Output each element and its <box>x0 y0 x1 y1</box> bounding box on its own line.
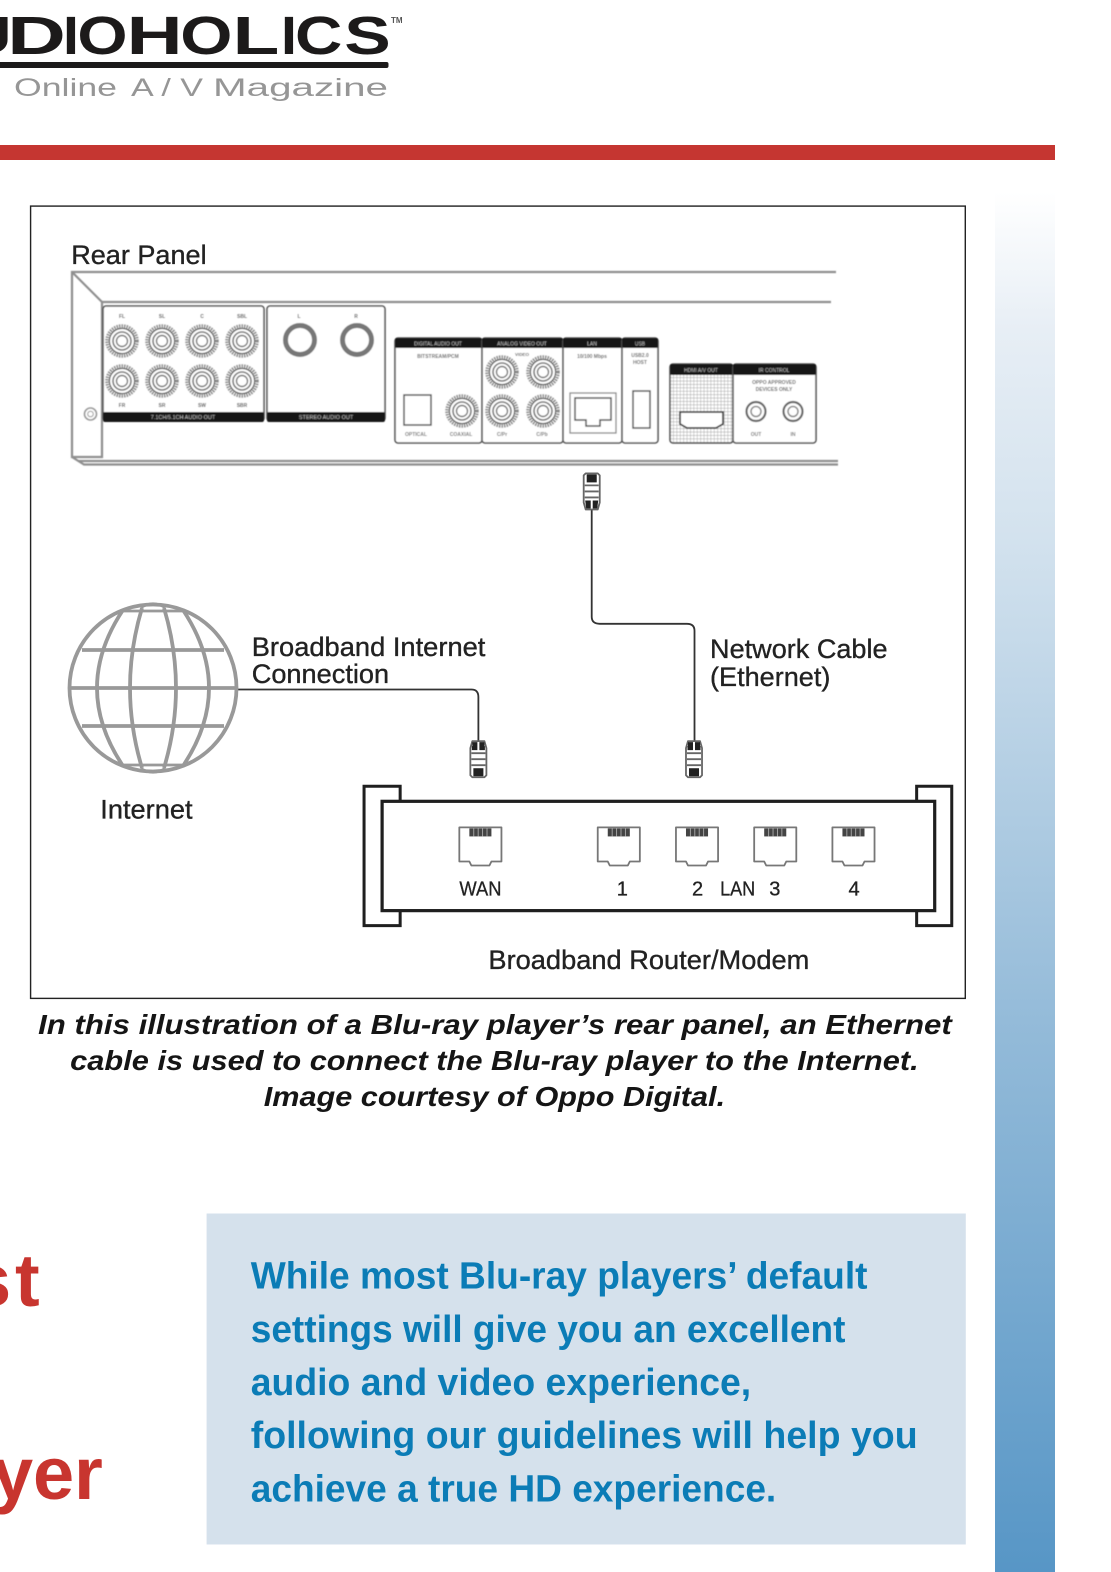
callout text: settings will give you an excellent <box>251 1309 846 1351</box>
Ethernet plug at router LAN <box>686 741 702 777</box>
analog video output: C/Pr <box>497 432 507 438</box>
logo wordmark <box>0 5 391 66</box>
analog video output: ANALOG VIDEO OUT <box>497 342 547 348</box>
logo: Audioholics Online A/V Magazine <box>0 5 403 102</box>
broadband cable from globe to WAN <box>238 689 478 742</box>
router port labels: 1 <box>617 879 628 901</box>
IR control <box>733 364 816 443</box>
callout text: While most Blu-ray players’ default <box>251 1256 868 1298</box>
logo tagline: Magazine <box>213 74 388 102</box>
digital audio output: DIGITAL AUDIO OUT <box>414 342 462 348</box>
icon: globe <box>70 604 236 772</box>
multichannel audio outputs: C <box>200 314 204 320</box>
digital audio output: COAXIAL <box>450 432 472 438</box>
multichannel audio outputs: FR <box>119 403 126 409</box>
multichannel audio outputs: FL <box>119 314 125 320</box>
callout background <box>207 1214 966 1544</box>
logo wordmark: L <box>233 6 279 66</box>
logo tagline: Online <box>14 74 117 102</box>
label: broadband internet connection: Connection <box>252 658 389 689</box>
router <box>364 786 952 926</box>
stereo audio outputs <box>267 306 385 422</box>
IR control: IR CONTROL <box>759 368 790 374</box>
caption: cable is used to connect the Blu-ray player to the Internet. <box>70 1045 919 1076</box>
callout text: audio and video experience, <box>251 1362 751 1404</box>
IR control: DEVICES ONLY <box>756 387 793 393</box>
logo wordmark: I <box>281 5 297 66</box>
callout <box>207 1214 966 1544</box>
digital audio output <box>395 338 482 443</box>
HDMI output: HDMI A/V OUT <box>684 368 718 374</box>
multichannel audio outputs <box>103 306 264 422</box>
sidebar gradient strip <box>995 192 1055 1572</box>
Ethernet plug at player <box>584 473 600 509</box>
callout text: achieve a true HD experience. <box>251 1468 776 1510</box>
LAN port <box>563 338 622 443</box>
caption <box>38 1009 954 1112</box>
digital audio output: BITSTREAM/PCM <box>417 354 459 360</box>
logo wordmark: O <box>77 5 128 66</box>
IR control: IN <box>790 432 796 438</box>
multichannel audio outputs: SL <box>159 314 165 320</box>
clipped red heading <box>0 1239 103 1515</box>
logo tagline <box>14 74 388 102</box>
LAN port 2 <box>676 827 718 866</box>
analog video output: C/Pb <box>536 432 548 438</box>
label: router: Broadband Router/Modem <box>488 944 809 975</box>
heading: rear panel: Rear Panel <box>71 239 207 270</box>
logo wordmark: D <box>7 5 66 66</box>
panel: connection diagram <box>31 206 965 998</box>
label: network cable: (Ethernet) <box>710 661 830 692</box>
multichannel audio outputs: SR <box>159 403 166 409</box>
caption: In this illustration of a Blu-ray player’s rear panel, an Ethernet <box>38 1009 954 1040</box>
caption: Image courtesy of Oppo Digital. <box>264 1081 725 1112</box>
chassis outline <box>72 272 838 464</box>
HDMI output <box>670 364 733 443</box>
router port labels: 3 <box>769 879 780 901</box>
analog video output: VIDEO <box>515 352 529 357</box>
label: internet: Internet <box>100 793 193 824</box>
logo wordmark: C <box>295 5 342 66</box>
label: network cable: Network Cable <box>710 633 888 664</box>
Ethernet plug at router WAN <box>470 741 486 777</box>
router port labels: 2 <box>692 879 703 901</box>
stereo audio outputs: STEREO AUDIO OUT <box>299 415 354 421</box>
Blu-ray player rear panel <box>72 272 838 464</box>
logo wordmark: I <box>63 5 79 66</box>
multichannel audio outputs: 7.1CH/5.1CH AUDIO OUT <box>151 415 216 421</box>
red header bar <box>0 145 1055 160</box>
LAN port 4 <box>832 827 875 866</box>
LAN port 1 <box>598 827 640 866</box>
stereo audio outputs: L <box>297 314 301 320</box>
diagram frame <box>31 206 965 998</box>
router port labels: 4 <box>848 879 860 901</box>
analog video output <box>482 338 563 443</box>
digital audio output: OPTICAL <box>405 432 427 438</box>
LAN port 3 <box>754 827 796 866</box>
logo wordmark: O <box>180 5 232 66</box>
screw <box>84 408 96 420</box>
LAN port: 10/100 Mbps <box>577 354 607 360</box>
multichannel audio outputs: SBR <box>237 403 248 409</box>
WAN port <box>459 827 501 866</box>
USB port <box>622 338 658 443</box>
USB port: HOST <box>633 360 647 366</box>
network cable between player and router <box>592 509 695 742</box>
logo wordmark: S <box>344 6 391 66</box>
LAN port: LAN <box>587 342 597 348</box>
router port labels: WAN <box>459 879 501 901</box>
logo underline <box>0 62 388 68</box>
router body <box>382 801 935 911</box>
multichannel audio outputs: SW <box>198 403 206 409</box>
callout text: following our guidelines will help you <box>251 1415 918 1457</box>
stereo audio outputs: R <box>354 314 358 320</box>
IR control: OPPO APPROVED <box>752 380 796 386</box>
USB port: USB <box>635 342 646 348</box>
logo tagline: A / V <box>131 74 203 102</box>
router port labels <box>459 879 860 901</box>
logo wordmark: H <box>127 6 183 66</box>
router brackets <box>364 786 952 926</box>
USB port: USB2.0 <box>631 353 649 359</box>
router port labels: LAN <box>720 879 755 901</box>
multichannel audio outputs: SBL <box>237 314 247 320</box>
IR control: OUT <box>751 432 761 438</box>
label: broadband internet connection: Broadband Internet <box>252 631 486 662</box>
logo trademark: TM <box>391 16 403 25</box>
callout text <box>251 1256 918 1510</box>
